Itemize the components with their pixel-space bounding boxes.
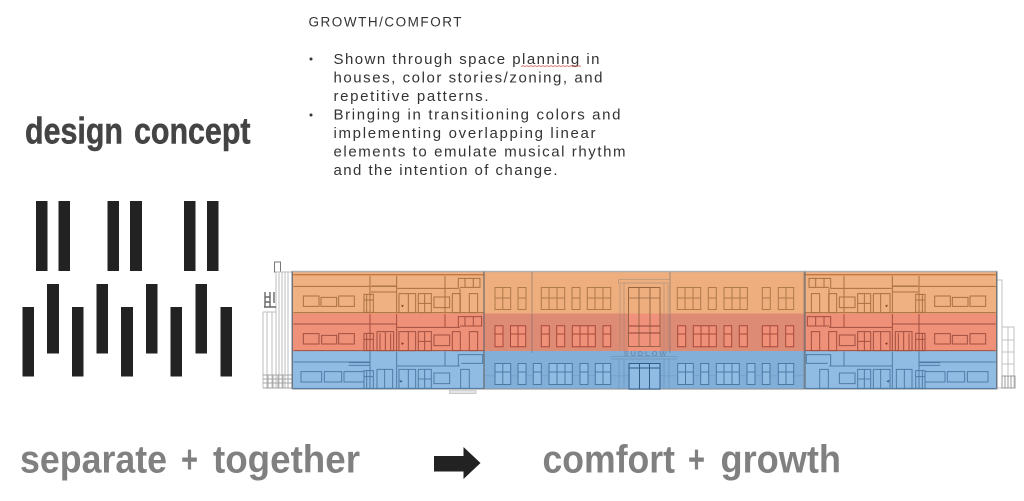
right wing details [805, 272, 997, 388]
caption: comfort + growth: comfort [542, 438, 675, 482]
heading: growth/comfort: GROWTH/COMFORT [308, 14, 462, 30]
right annex [997, 280, 1015, 388]
text block: bullet list: Bringing in transitioning colors and [334, 106, 620, 124]
zone: red middle floor [292, 314, 997, 351]
text block: bullet list: and the intention of change. [334, 162, 558, 179]
icon: separate bars pattern [36, 201, 218, 271]
zone: orange top floor [292, 272, 997, 314]
centre windows blue floor [495, 364, 794, 384]
text block: bullet list: repetitive patterns. [334, 88, 488, 105]
icon: together staggered bars pattern [22, 284, 232, 376]
building elevation with colour zones [263, 262, 1015, 394]
centre block darker tint [484, 272, 804, 314]
caption: comfort + growth: growth [720, 438, 841, 482]
left annex [263, 262, 292, 388]
centre block edges [484, 272, 804, 389]
caption: separate + together [20, 438, 360, 482]
centre windows orange floor [495, 288, 794, 310]
text block: bullet list: houses, color stories/zoning, and [334, 70, 602, 86]
title: design concept: concept [134, 110, 250, 152]
text block: bullet list: Shown through space planning in [334, 51, 600, 68]
outline [292, 272, 997, 389]
left wing details [292, 272, 484, 388]
centre windows red floor [495, 326, 794, 347]
title: design concept: design [25, 110, 123, 152]
caption: separate + together: + [181, 438, 198, 482]
lower step [450, 390, 476, 394]
arrow [434, 447, 480, 479]
text block: bullet list: elements to emulate musical rhythm [334, 144, 626, 160]
caption: comfort + growth [542, 438, 841, 482]
text block: bullet list: implementing overlapping linear [334, 125, 596, 142]
caption: comfort + growth: + [688, 438, 705, 482]
caption: separate + together: together [213, 438, 360, 482]
zone: blue ground floor [292, 351, 997, 389]
entry bay tint [628, 314, 660, 351]
building sign: SUDLOW [624, 349, 667, 358]
title: design concept [25, 110, 250, 152]
entry bay [611, 280, 677, 389]
text block: bullet list [310, 51, 626, 179]
caption: separate + together: separate [20, 438, 167, 482]
